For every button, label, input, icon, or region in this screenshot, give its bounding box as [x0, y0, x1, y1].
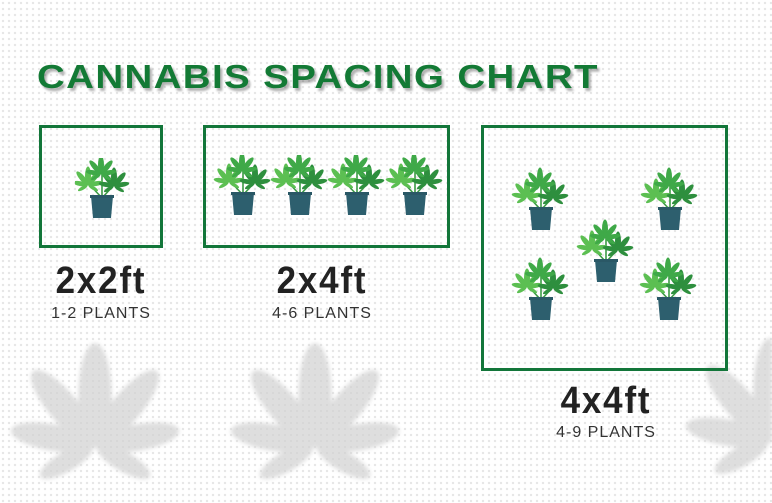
title: CANNABIS SPACING CHART — [37, 58, 599, 95]
panel: 2x2ft — [39, 125, 163, 248]
plants row — [214, 155, 442, 215]
text: 1-2 plants: 1-2 PLANTS — [51, 305, 151, 322]
text: 4-9 plants: 4-9 PLANTS — [556, 424, 656, 441]
plants grid — [512, 168, 698, 320]
label: 2x4ft: 2x4ft — [277, 260, 367, 302]
label: 4x4ft: 4x4ft — [561, 380, 651, 422]
panel: 2x4ft — [203, 125, 450, 248]
label: 2x2ft: 2x2ft — [56, 260, 146, 302]
icon: plant — [75, 158, 129, 218]
text: 4-6 plants: 4-6 PLANTS — [272, 305, 372, 322]
panel: 4x4ft — [481, 125, 728, 371]
